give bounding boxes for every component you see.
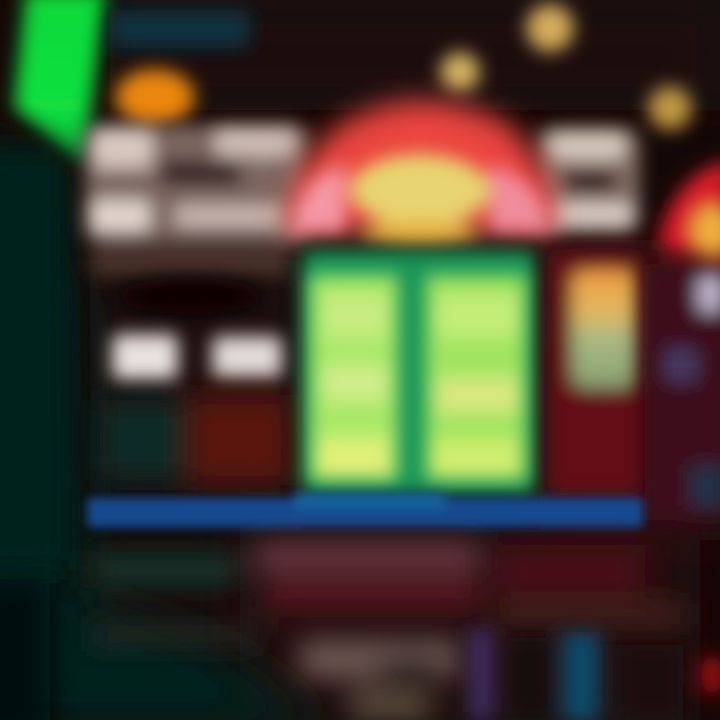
right side machine: [548, 250, 643, 495]
dark blue sign: [110, 10, 250, 48]
orange lamp: [115, 69, 195, 125]
right marquee lettering: [535, 128, 640, 233]
central dome topper: [285, 100, 555, 238]
far right machine: [645, 160, 720, 520]
blue bar: [87, 492, 643, 528]
base of machine: [300, 640, 460, 720]
white display blocks: [112, 334, 282, 380]
bokeh lights: [440, 4, 692, 130]
left reel: [310, 275, 398, 480]
left dark teal panel: [0, 130, 330, 720]
lower left cabinet: [100, 395, 290, 485]
green neon bar: [14, 0, 106, 162]
left dark arch: [118, 278, 262, 314]
left marquee lettering: [85, 125, 310, 276]
right reel: [426, 275, 526, 480]
coloured base stripes: [468, 628, 720, 720]
lower panel text bands: [90, 542, 685, 643]
reel panels: [302, 250, 536, 495]
